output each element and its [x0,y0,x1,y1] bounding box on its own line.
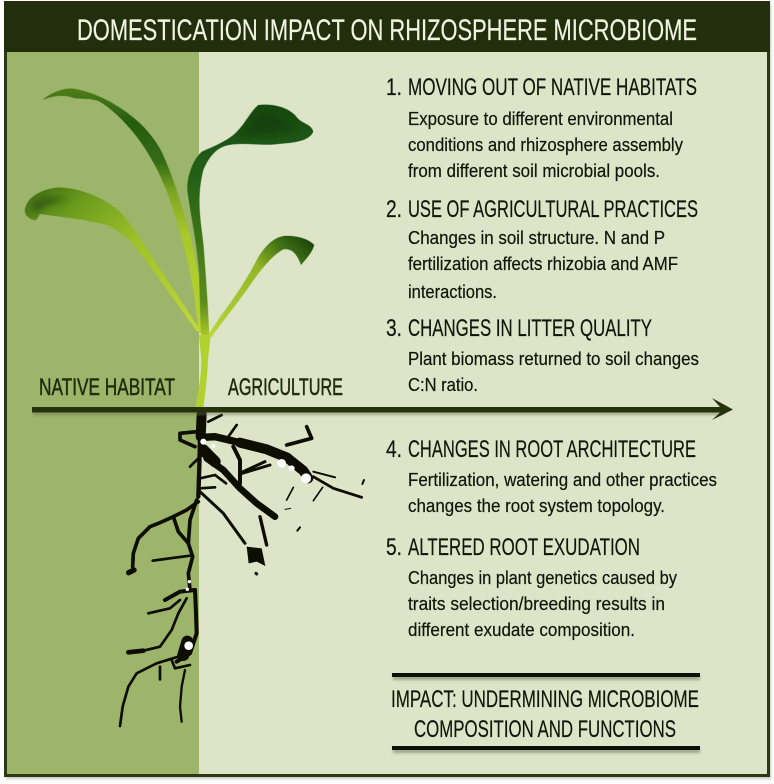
leaf: top left [42,88,207,333]
label: native habitat: NATIVE HABITAT [39,374,175,401]
text 1: from different soil microbial pools. [408,161,660,181]
root highlights [184,439,311,650]
panel: native habitat background [7,52,199,774]
title bar [4,1,770,52]
heading 5 [386,534,640,561]
stem [195,335,211,408]
leaf: lower left [25,187,200,332]
item 5 [386,534,677,640]
root system illustration [120,414,364,726]
leaf shadow: lower left [33,197,68,213]
heading 3: CHANGES IN LITTER QUALITY [408,315,652,342]
text 2: fertilization affects rhizobia and AMF [408,254,678,274]
heading 3 [386,315,652,342]
panel: agriculture background [199,52,767,774]
text 3: C:N ratio. [408,375,478,395]
plant shoot illustration [25,88,314,408]
text 4 [408,470,717,516]
heading 2: 2. [386,196,402,223]
leaf shadow: top right [240,112,293,137]
item 1 [386,74,697,181]
text 5: Changes in plant genetics caused by [408,568,677,588]
text 2 [408,228,678,302]
root tip blob [247,547,265,566]
item 2 [386,196,698,302]
text 1 [408,109,683,181]
leaf: lower right [208,236,314,337]
axis arrow [32,398,733,420]
heading 5: ALTERED ROOT EXUDATION [408,534,640,561]
text 1: conditions and rhizosphere assembly [408,135,683,155]
heading 4: 4. [386,436,402,463]
leaf: top right [187,105,313,337]
text 3: Plant biomass returned to soil changes [408,349,699,369]
text 1: Exposure to different environmental [408,109,673,129]
impact text [391,686,699,743]
text 2: Changes in soil structure. N and P [408,228,665,248]
text 5: different exudate composition. [408,620,635,640]
item 3 [386,315,699,395]
heading 5: 5. [386,534,402,561]
text 5 [408,568,677,640]
text 3 [408,349,699,395]
item 4 [386,436,717,516]
text 4: changes the root system topology. [408,496,665,516]
callout: impact [391,673,700,753]
text 2: interactions. [408,282,497,302]
text 4: Fertilization, watering and other practices [408,470,717,490]
heading 3: 3. [386,315,402,342]
label: agriculture: AGRICULTURE [228,374,343,401]
heading 1: 1. [386,74,402,101]
text 5: traits selection/breeding results in [408,594,665,614]
